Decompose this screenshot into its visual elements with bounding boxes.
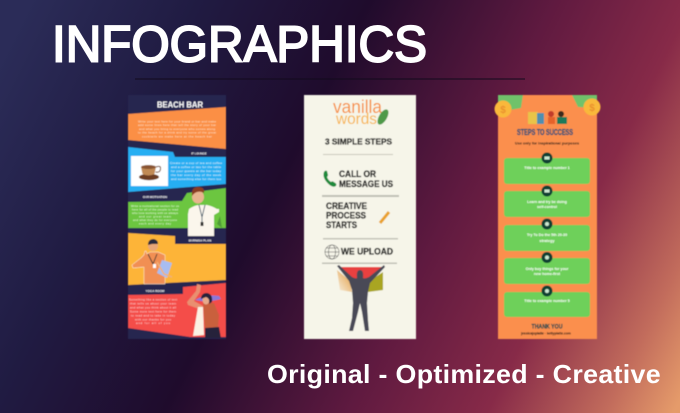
step card 2: self-control	[537, 205, 557, 209]
step 1: call or message us: CALL OR	[339, 169, 376, 179]
icon: globe	[325, 245, 339, 259]
red section: Some more text here for them	[130, 310, 177, 314]
step 2: creative process starts: STARTS	[326, 220, 357, 230]
orange section: cocktails we make here at the beach bar	[142, 134, 212, 138]
heading: steps to success: STEPS TO SUCCESS	[517, 127, 573, 137]
step card 2	[504, 186, 590, 217]
step 2: creative process starts: PROCESS	[326, 210, 366, 220]
decoration: money top right	[572, 95, 600, 116]
panel: beach bar infographic	[128, 95, 226, 339]
green section: Write a motivational section for us	[131, 204, 180, 208]
footer: thank you: jessicajoplatte · ketlyplatte.com	[520, 332, 571, 336]
green section: each and every day	[139, 222, 172, 226]
green section: who love working with us always	[132, 211, 179, 215]
step card 4	[504, 252, 590, 284]
blue section: and something else for them too	[171, 177, 221, 181]
step card 2: Learn and try be doing	[527, 200, 567, 204]
step card 1	[504, 152, 590, 184]
step 2: creative process starts: CREATIVE	[326, 201, 367, 211]
figure: man holding folder	[132, 239, 172, 284]
step card 5: Title to example number 5	[524, 299, 570, 303]
red section: Something like a section of text	[129, 298, 177, 302]
red section: and for all of you	[136, 321, 170, 325]
step card 3: strategy	[539, 238, 555, 243]
step card 1: Title to example number 1	[524, 166, 570, 170]
red section	[128, 283, 226, 338]
step card 3: Try To Do the 5th 20-30	[527, 233, 567, 237]
blue section: and a coffee or two for the table	[171, 165, 221, 169]
title underline	[135, 78, 525, 80]
icon: coffee cup photo	[131, 156, 168, 186]
panel: vanilla words infographic	[304, 95, 416, 339]
green section: and our great team	[139, 214, 172, 218]
step 1: call or message us	[324, 169, 393, 189]
panel: steps to success infographic	[494, 95, 600, 339]
step card 5	[504, 286, 590, 317]
footer: thank you: THANK YOU	[532, 324, 562, 330]
red section: that tells us about your team	[130, 302, 177, 306]
blue section: Create or a cup of tea and coffee	[170, 161, 222, 165]
label: yoga room: YOGA ROOM	[146, 289, 165, 293]
blue section: the bar every day of the week	[171, 173, 222, 177]
red section: and what you think about it all	[130, 306, 176, 310]
decoration: money top left: $	[500, 105, 506, 116]
step 1: call or message us: MESSAGE US	[339, 179, 393, 189]
figure: man with lanyard	[188, 187, 222, 236]
heading: beach bar: BEACH BAR	[157, 100, 203, 110]
orange section	[128, 107, 226, 149]
tagline: Original - Optimized - Creative	[267, 359, 661, 389]
icon: phone	[324, 171, 336, 187]
step card 3	[504, 218, 590, 251]
blue section: for your guests at the bar today	[171, 169, 222, 173]
step card 4: new home-first	[534, 272, 561, 276]
step card 4: Only buy things for your	[526, 267, 569, 271]
logo: vanilla words	[333, 97, 391, 128]
footer: thank you	[520, 324, 571, 336]
green section: here for all of the people to read	[132, 208, 178, 212]
label: green section: OUR MOTIVATION	[143, 195, 167, 199]
label: burnish plan: BURNISH PLAN	[189, 238, 211, 242]
illustration: man holding flag	[337, 265, 385, 331]
decoration: money top left	[494, 95, 523, 118]
green section	[128, 187, 226, 236]
blue section	[128, 147, 226, 192]
decoration: money top right: $	[589, 103, 595, 114]
step 3: we upload	[325, 245, 393, 259]
red section: to read and to take in today	[131, 314, 176, 318]
yellow section	[128, 233, 226, 285]
red section: with our thanks for you	[135, 318, 171, 322]
icon: people at work	[528, 111, 567, 124]
step 2: creative process starts	[326, 201, 389, 230]
step 3: we upload: WE UPLOAD	[341, 246, 393, 256]
title: INFOGRAPHICS	[52, 16, 427, 72]
logo: vanilla words: words	[335, 111, 377, 128]
heading: 3 simple steps: 3 SIMPLE STEPS	[325, 136, 392, 146]
icon: green leaf	[375, 108, 391, 126]
orange section: and what you bring to everyone who comes along	[139, 127, 215, 131]
icon: pencil	[380, 212, 389, 223]
subheading: Use only for inspirational purposes	[515, 142, 579, 146]
logo: vanilla words: vanilla	[333, 97, 383, 117]
green section: and what they do for everyone	[133, 218, 177, 222]
orange section: to the beach for a drink and try some of the great	[138, 131, 216, 135]
figure: woman pointing	[187, 284, 221, 338]
orange section: add some lines here that tell the story of your bar	[138, 123, 216, 127]
label: blue section: IT LOUNGE	[191, 151, 207, 155]
orange section: Write your text here for your brand or bar and make	[138, 120, 216, 124]
